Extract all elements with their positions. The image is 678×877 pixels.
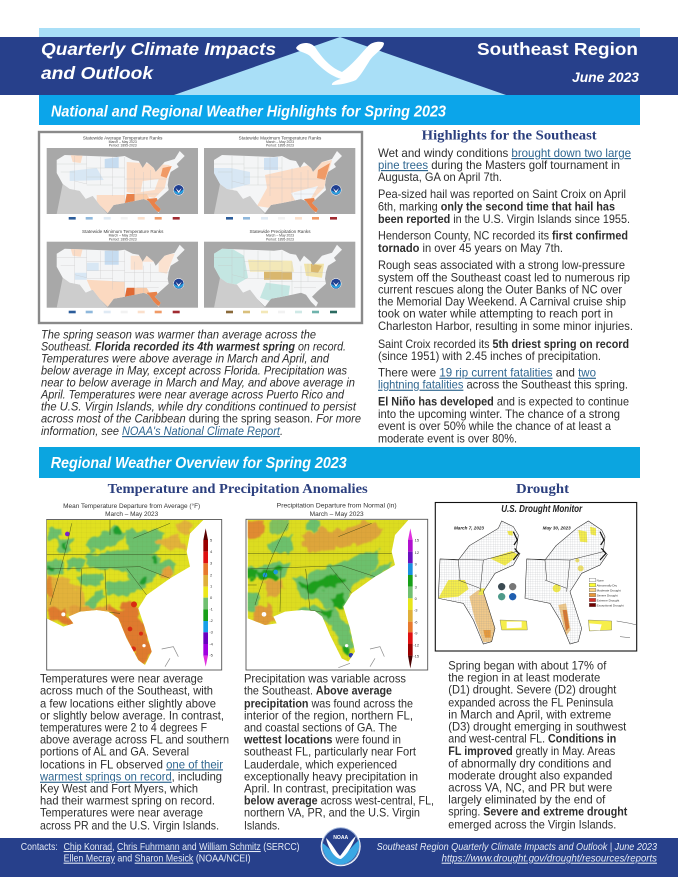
legend: precipitation colour bar (408, 528, 420, 668)
legend: temperature colour bar: 3 (210, 561, 213, 566)
text block: drought narrative: (D1) drought. Severe (D2) drought (448, 682, 617, 696)
text block: temperature narrative: across much of the Southeast, with (40, 684, 213, 698)
text block: drought narrative: across VA, NC, and PR but were (448, 781, 613, 795)
text block: precipitation narrative: wettest locations were found in (243, 732, 401, 746)
report title (41, 39, 276, 83)
text block: temperature narrative (39, 672, 229, 832)
text block: temperature narrative: warmest springs on record, including (39, 770, 222, 784)
icon: white gull (296, 42, 384, 85)
text block: precipitation narrative: April. In contrast, precipitation was (244, 782, 416, 796)
text block: drought narrative (448, 658, 627, 832)
report citation (377, 842, 657, 865)
legend: temperature colour bar (203, 528, 214, 667)
text block: precipitation narrative: interior of the region, northern FL, (244, 708, 413, 722)
contacts (21, 842, 300, 865)
map: average temperature ranks (47, 135, 198, 220)
text block: national summary caption: Temperatures were above average in March and April, and (41, 352, 330, 366)
legend: precipitation colour bar: 15 (415, 537, 420, 542)
chart: precipitation departure map: March – May 2023 (310, 511, 364, 518)
text block: southeast highlights: event is over 50% while the chance of at least a (378, 419, 611, 433)
text block: precipitation narrative: precipitation was found across the (244, 696, 413, 710)
map: average temperature ranks: Statewide Average Temperature Ranks (83, 135, 163, 140)
map: precipitation ranks: March – May 2023 (266, 234, 294, 238)
map: drought on March 7 (438, 521, 527, 644)
text block: southeast highlights: Pea-sized hail was reported on Saint Croix on April (378, 187, 626, 201)
text block: drought narrative: Spring began with about 17% of (448, 658, 607, 672)
agency logos (498, 583, 516, 600)
text block: drought narrative: emerged across the Virgin Islands. (448, 818, 616, 832)
text block: national summary caption: across most of the Caribbean during the spring season. For more (41, 413, 362, 426)
heading: highlights for the southeast: Highlights for the Southeast (422, 128, 597, 143)
text block: temperature narrative: had their warmest spring on record. (40, 794, 215, 808)
text block: drought narrative: expanded across the FL Peninsula (448, 695, 614, 709)
map: drought on May 30: May 30, 2023 (543, 525, 571, 530)
text block: drought narrative: moderate drought also expanded (448, 769, 612, 783)
map: maximum temperature ranks: March – May 2023 (266, 140, 294, 144)
text block: precipitation narrative: Islands. (244, 818, 280, 832)
heading: temperature and precipitation anomalies: Temperature and Precipitation Anomalies (108, 481, 368, 496)
report citation: https://www.drought.gov/drought/resources/reports (442, 854, 657, 865)
legend: temperature colour bar: -1 (209, 607, 214, 612)
text block: national summary caption (40, 328, 362, 438)
legend: precipitation colour bar: 12 (415, 550, 420, 555)
legend: temperature colour bar: 2 (210, 572, 213, 577)
text block: drought narrative: largely eliminated by the end of (448, 793, 606, 807)
text block: southeast highlights: (since 1951) with 2.45 inches of precipitation. (378, 349, 601, 363)
text block: national summary caption: The spring season was warmer than average across the (41, 328, 317, 342)
legend: drought categories: None (597, 578, 604, 582)
text block: precipitation narrative: northern VA, PR, and the U.S. Virgin (244, 806, 420, 820)
text block: precipitation narrative: and coastal sections of GA. The (244, 720, 397, 734)
legend: temperature colour bar: -4 (209, 641, 214, 646)
map: minimum temperature ranks: Period: 1895-2023 (109, 237, 137, 241)
text block: southeast highlights: moderate event is over 80%. (378, 432, 517, 446)
section heading: regional weather overview (39, 447, 640, 478)
legend: temperature colour bar: 5 (210, 537, 213, 542)
text block: southeast highlights: There were 19 rip current fatalities and two (378, 366, 596, 380)
chart: mean temperature departure map: Mean Temperature Departure from Average (°F) (63, 502, 200, 510)
legend: precipitation colour bar: 9 (415, 562, 418, 567)
text block: temperature narrative: or slightly below average. In contrast, (40, 708, 224, 722)
text block: southeast highlights: tornado in over 45 years on May 7th. (378, 241, 563, 255)
legend: temperature colour bar: 4 (210, 549, 213, 554)
chart: precipitation departure map (245, 503, 428, 670)
legend: precipitation colour bar: -6 (414, 619, 418, 624)
heading: drought: Drought (516, 481, 570, 496)
legend: drought categories: Exceptional Drought (597, 603, 624, 607)
legend: precipitation colour bar: 6 (415, 573, 418, 578)
text block: southeast highlights: 6th, marking only the second time that hail has (378, 200, 615, 214)
text block: temperature narrative: locations in FL observed one of their (40, 757, 223, 771)
contacts: Contacts: (21, 842, 58, 853)
footer band (0, 826, 678, 877)
legend: drought categories: Severe Drought (597, 593, 618, 597)
map: precipitation ranks (204, 229, 355, 313)
text block: southeast highlights (378, 146, 633, 446)
map: drought on March 7: March 7, 2023 (454, 525, 485, 530)
legend: drought categories: Moderate Drought (597, 588, 621, 592)
text block: southeast highlights: been reported in the U.S. Virgin Islands since 1955. (378, 212, 630, 226)
text block: temperature narrative: above average across FL and southern (40, 732, 229, 746)
legend: temperature colour bar: -2 (209, 618, 214, 623)
text block: southeast highlights: current rescues along the Outer Banks of NC over (378, 282, 622, 296)
text block: temperature narrative: across PR and the U.S. Virgin Islands. (40, 818, 219, 832)
legend: precipitation colour bar: -9 (414, 631, 418, 636)
text block: temperature narrative: Key West and Fort Myers, which (40, 782, 198, 796)
text block: precipitation narrative: Precipitation was variable across (244, 672, 406, 686)
chart: U.S. drought monitor maps (435, 502, 637, 651)
text block: drought narrative: in March and April, with extreme (448, 707, 612, 721)
text block: precipitation narrative: exceptionally heavy precipitation in (244, 770, 418, 784)
map: minimum temperature ranks (47, 229, 198, 313)
text block: temperature narrative: Temperatures were near average (40, 806, 203, 820)
map: precipitation ranks: Period: 1895-2023 (266, 237, 294, 241)
legend: drought categories (589, 578, 624, 607)
icon: NOAA logo (321, 826, 361, 866)
map: minimum temperature ranks: Statewide Minimum Temperature Ranks (82, 229, 164, 234)
text block: precipitation narrative: Lauderdale, which experienced (244, 757, 397, 771)
text block: temperature narrative: Temperatures were near average (40, 672, 203, 686)
text block: southeast highlights: lightning fatalities across the Southeast this spring. (378, 378, 628, 392)
section heading: regional weather overview: Regional Weather Overview for Spring 2023 (51, 455, 347, 472)
legend: precipitation colour bar: 0 (415, 596, 418, 601)
text block: precipitation narrative: southeast FL, particularly near Fort (244, 744, 417, 758)
text block: southeast highlights: system off the Southeast coast led to numerous rip (378, 271, 630, 285)
text block: drought narrative: FL improved greatly in May. Areas (448, 744, 615, 758)
text block: national summary caption: April. Temperatures were near average across Puerto Rico and (40, 388, 345, 402)
section heading: national and regional highlights (39, 95, 640, 125)
legend: temperature colour bar: 1 (210, 584, 213, 589)
text block: drought narrative: of abnormally dry conditions and (448, 756, 611, 770)
text block: southeast highlights: pine trees during the Masters golf tournament in (378, 158, 620, 172)
chart: U.S. drought monitor maps: U.S. Drought Monitor (501, 504, 583, 515)
text block: drought narrative: the region in at least moderate (448, 670, 601, 684)
header banner (0, 28, 678, 95)
legend: precipitation colour bar: -15 (413, 654, 420, 659)
legend: temperature colour bar: -5 (209, 653, 214, 658)
map: maximum temperature ranks: Statewide Maximum Temperature Ranks (239, 135, 322, 140)
text block: precipitation narrative: the Southeast. Above average (244, 684, 392, 698)
text block: temperature narrative: portions of AL and GA. Several (40, 744, 189, 758)
text block: drought narrative: (D3) drought emerging in southwest (448, 719, 627, 733)
map: maximum temperature ranks (204, 135, 355, 220)
text block: temperature narrative: temperatures were 2 to 4 degrees F (40, 720, 207, 734)
legend: drought categories: Abnormally Dry (597, 583, 618, 587)
chart: mean temperature departure map (43, 502, 222, 670)
text block: southeast highlights: Henderson County, NC recorded its first confirmed (378, 229, 628, 243)
text block: national summary caption: near to below average in March and May, and above average in (41, 376, 355, 390)
text block: southeast highlights: into the upcoming winter. The chance of a strong (378, 407, 620, 421)
chart: precipitation departure map: Precipitation Departure from Normal (in) (277, 503, 397, 510)
legend: drought categories: Extreme Drought (597, 598, 619, 602)
text block: national summary caption: the U.S. Virgin Islands, while dry conditions continued to persist (41, 400, 357, 414)
text block: precipitation narrative: below average across west-central, FL, (244, 794, 434, 808)
text block: southeast highlights: took on water while attempting to reach port in (378, 307, 613, 321)
text block: national summary caption: information, see NOAA's National Climate Report. (41, 425, 283, 438)
legend: precipitation colour bar: 3 (415, 585, 418, 590)
text block: southeast highlights: Charleston Harbor, resulting in some minor injuries. (378, 319, 633, 333)
region and date: June 2023 (572, 70, 639, 85)
icon: NOAA logo: NOAA (333, 835, 348, 841)
text block: drought narrative: spring. Severe and extreme drought (448, 805, 627, 819)
map: precipitation ranks: Statewide Precipitation Ranks (249, 229, 311, 234)
legend: precipitation colour bar: -3 (414, 607, 418, 612)
map: average temperature ranks: March – May 2023 (109, 140, 137, 144)
legend: temperature colour bar: -3 (209, 630, 214, 635)
text block: precipitation narrative (243, 672, 434, 832)
map: drought on May 30 (525, 521, 637, 644)
report title: Quarterly Climate Impacts (41, 39, 276, 59)
text block: drought narrative: and west-central FL. Conditions in (448, 732, 616, 746)
region and date (477, 39, 639, 85)
legend: precipitation colour bar: -12 (413, 642, 420, 647)
text block: southeast highlights: El Niño has developed and is expected to continue (378, 395, 629, 409)
text block: national summary caption: Southeast. Florida recorded its 4th warmest spring on record. (41, 340, 346, 354)
text block: temperature narrative: a few locations either slightly above (40, 696, 216, 710)
panel: national rank maps (39, 132, 362, 323)
map: maximum temperature ranks: Period: 1895-2023 (266, 144, 294, 148)
map: average temperature ranks: Period: 1895-2023 (109, 144, 137, 148)
header triangle (174, 37, 506, 95)
region and date: Southeast Region (477, 39, 638, 59)
text block: southeast highlights: Rough seas associated with a strong low-pressure (378, 258, 625, 272)
text block: southeast highlights: Saint Croix recorded its 5th driest spring on record (378, 337, 629, 351)
text block: national summary caption: below average in May, except across Florida. Precipitation was (41, 364, 347, 378)
legend: temperature colour bar: 0 (210, 595, 213, 600)
section heading: national and regional highlights: National and Regional Weather Highlights for Spring 2023 (51, 104, 446, 120)
map: minimum temperature ranks: March – May 2023 (109, 234, 137, 238)
text block: southeast highlights: the Memorial Day Weekend. A Carnival cruise ship (378, 294, 626, 308)
text block: southeast highlights: Wet and windy conditions brought down two large (378, 146, 631, 160)
contacts: Ellen Mecray and Sharon Mesick (NOAA/NCEI) (64, 854, 251, 865)
contacts: Chip Konrad, Chris Fuhrmann and William Schmitz (SERCC) (64, 842, 300, 853)
report title: and Outlook (41, 63, 154, 83)
text block: southeast highlights: Augusta, GA on April 7th. (378, 170, 502, 184)
chart: mean temperature departure map: March – May 2023 (105, 511, 159, 518)
